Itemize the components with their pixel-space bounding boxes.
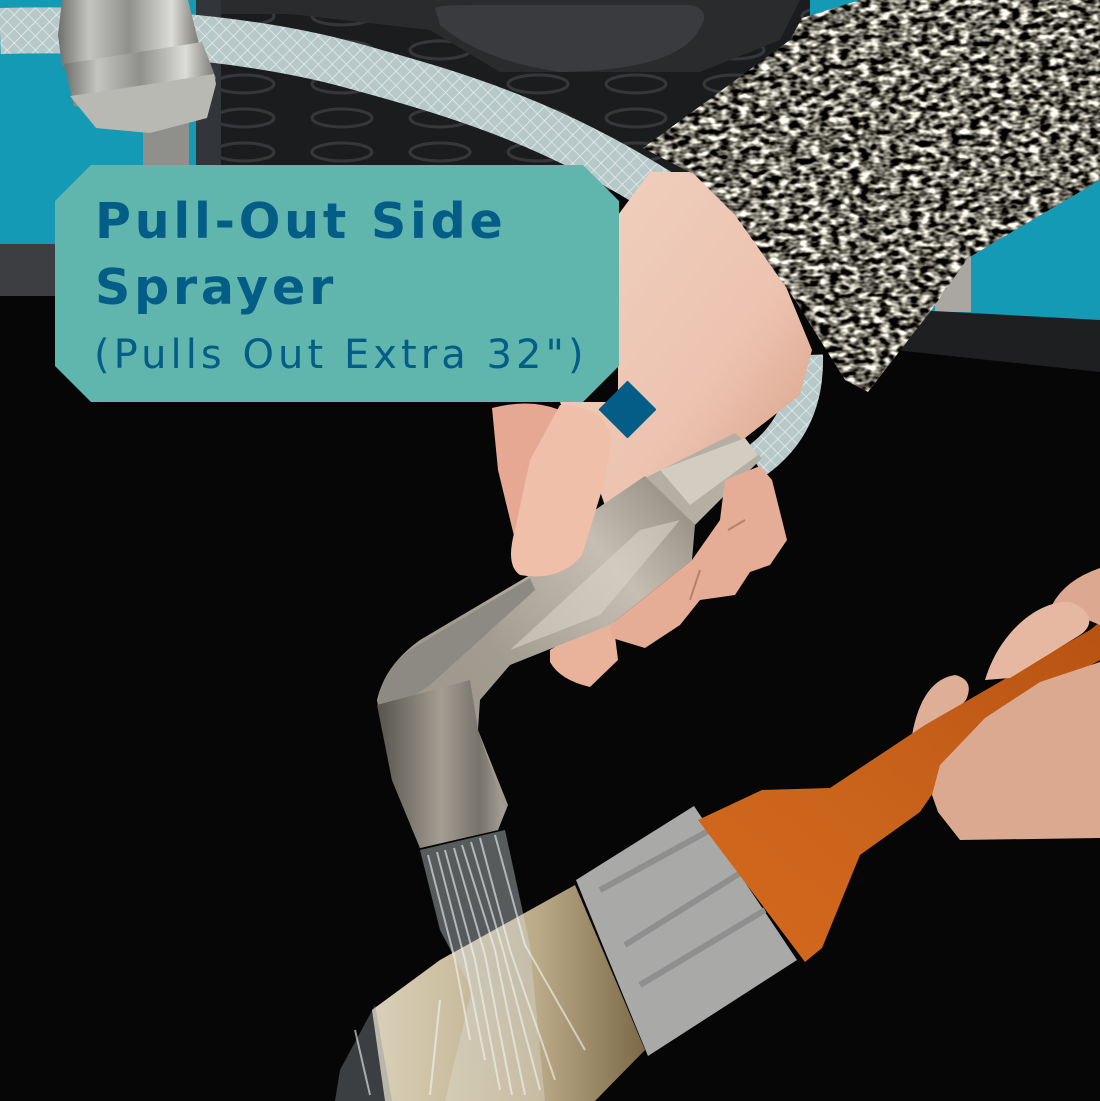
faucet collar: [58, 0, 216, 133]
label panel: [55, 165, 619, 402]
index finger knuckle behind thumb: [492, 403, 570, 575]
hand palm holding sprayer: [560, 172, 812, 520]
brush ferrule: [576, 806, 797, 1056]
callout marker diamond: [599, 381, 656, 438]
hose at sprayer: [755, 355, 806, 462]
brush handle: [698, 622, 1100, 962]
teal wall left: [0, 0, 225, 250]
teal wall right: [800, 0, 1100, 322]
black mat: [196, 0, 810, 190]
faucet post right: [935, 240, 971, 312]
hose: [0, 30, 680, 205]
faucet post: [143, 120, 189, 166]
thumb: [511, 405, 612, 576]
fourth finger: [550, 612, 618, 687]
fingers: [610, 466, 787, 648]
sprayer head: [377, 438, 758, 848]
water stream: [335, 830, 585, 1101]
brush bristles: [372, 885, 645, 1101]
subheading: (Pulls Out Extra 32"): [94, 332, 588, 378]
sweater cuff: [640, 0, 1100, 395]
right hand holding brush: [932, 568, 1100, 840]
sink rim left: [0, 244, 60, 296]
sink rim right: [895, 310, 1100, 372]
heading: Pull-Out Side Sprayer: [95, 193, 507, 316]
small finger behind brush handle: [912, 675, 969, 745]
sprayer neck: [645, 433, 762, 525]
